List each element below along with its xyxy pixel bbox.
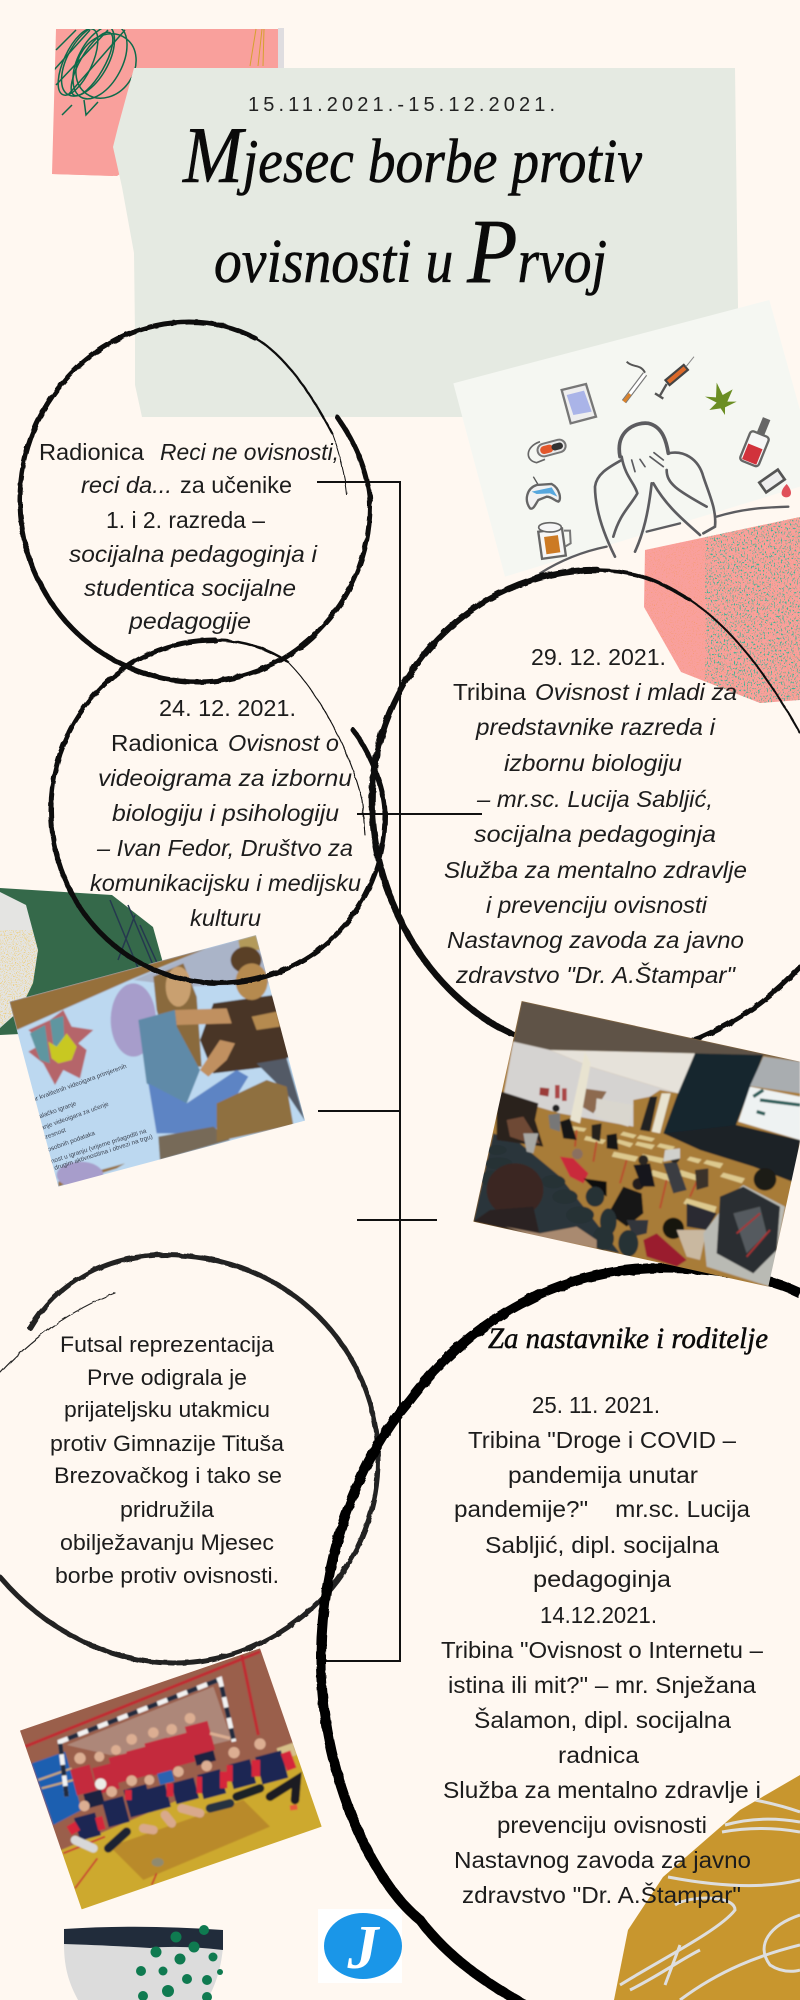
- slide text: [32, 1063, 154, 1172]
- text: circle 1 workshop: socijalna pedagoginja i: [69, 541, 318, 567]
- text: circle 1 workshop: studentica socijalne: [84, 575, 296, 601]
- seated students: [560, 1157, 588, 1183]
- text: circle 4 futsal: borbe protiv ovisnosti.: [55, 1563, 279, 1588]
- text: circle 1 workshop: reci da...: [81, 472, 172, 498]
- icon: beer mug: [538, 523, 571, 559]
- text: circle 4 futsal: obilježavanju Mjesec: [60, 1530, 274, 1555]
- front row in navy: [74, 1750, 288, 1841]
- gold shape with squiggles: [614, 1775, 800, 2000]
- text: circle 4 futsal: Brezovačkog i tako se: [54, 1463, 282, 1488]
- slide text: anje videoigara za učenje: [40, 1101, 110, 1132]
- timeline connector: [317, 482, 482, 1661]
- text: circle 2 workshop: – Ivan Fedor, Društvo za: [96, 835, 353, 861]
- desks: [572, 1126, 745, 1217]
- slide text: drugim aktivnostima i obvezi na trgu): [53, 1133, 154, 1172]
- green shape with pale piece: [0, 888, 170, 1035]
- text: circle 2 workshop: komunikacijsku i medijsku: [90, 870, 361, 896]
- title: Mjesec borbe protiv: [182, 112, 642, 200]
- text: circle 2 workshop: 24. 12. 2021.: [159, 695, 296, 721]
- brush circle 5: [321, 1268, 800, 2000]
- text: circle 3 tribune: [444, 644, 747, 988]
- grey torn paper title card: [113, 68, 738, 420]
- icon: pill capsule: [528, 438, 567, 463]
- text: circle 5 tribunes: pandemije?" mr.sc. Lucija: [454, 1496, 750, 1522]
- title: ovisnosti u Prvoj: [214, 200, 607, 302]
- back row in red: [70, 1721, 215, 1795]
- student with backpack: [703, 1185, 785, 1287]
- text: circle 1 workshop: za učenike: [180, 472, 292, 498]
- text: circle 3 tribune: predstavnike razreda i: [475, 714, 716, 740]
- text: circle 5 tribunes: Sabljić, dipl. socijalna: [485, 1532, 719, 1558]
- text: circle 4 futsal: Prve odigrala je: [87, 1365, 247, 1390]
- text: circle 4 futsal: Futsal reprezentacija: [60, 1332, 275, 1357]
- slide text: tresnost: [43, 1127, 67, 1141]
- slide text: osobnih podataka: [47, 1130, 96, 1154]
- text: circle 1 workshop: 1. i 2. razreda –: [106, 507, 265, 533]
- icon: person head in hands: [540, 423, 788, 573]
- text: circle 5 tribunes: Tribina "Droge i COVID –: [468, 1427, 736, 1453]
- text: circle 4 futsal: pridružila: [120, 1497, 215, 1522]
- brush circle 3: [372, 570, 800, 1052]
- text: circle 1 workshop: pedagogije: [128, 608, 251, 634]
- brush circle 4: [0, 1255, 378, 1663]
- photo: videogame workshop slide: [10, 935, 305, 1186]
- date range: 15.11.2021.-15.12.2021.: [248, 94, 555, 116]
- text: circle 3 tribune: Služba za mentalno zdravlje: [444, 857, 747, 883]
- text: circle 3 tribune: zdravstvo "Dr. A.Štampar": [455, 961, 737, 988]
- text: circle 2 workshop: [90, 695, 361, 931]
- photo: auditorium tribune: [460, 1000, 800, 1300]
- logo: J: [346, 1914, 380, 1982]
- text: circle 1 workshop: Reci ne ovisnosti,: [160, 439, 339, 465]
- text: circle 5 tribunes: istina ili mit?" – mr. Snježana: [448, 1672, 756, 1698]
- text: circle 5 tribunes: Nastavnog zavoda za javno: [454, 1847, 751, 1873]
- pink torn paper with scribble: [50, 15, 284, 176]
- logo: [318, 1909, 402, 1983]
- text: circle 2 workshop: Ovisnost o: [228, 730, 339, 756]
- icon: syringe: [655, 357, 694, 399]
- text: circle 3 tribune: Tribina: [453, 679, 526, 705]
- photo: futsal team: [20, 1648, 322, 1910]
- icon: cannabis leaf: [705, 383, 737, 415]
- slide text: ar kvalitetnih videoigara primjerenih: [32, 1063, 128, 1104]
- student in red: [643, 1233, 687, 1267]
- text: circle 2 workshop: kulturu: [190, 905, 261, 931]
- seated girl foreground: [486, 1163, 544, 1210]
- seats: [480, 1145, 638, 1257]
- text: circle 4 futsal: [50, 1332, 285, 1588]
- star icon on slide: [28, 1010, 93, 1085]
- text: circle 5 tribunes: 14.12.2021.: [540, 1602, 657, 1628]
- text: circle 2 workshop: videoigrama za izbornu: [98, 765, 352, 791]
- bowl with green dots: [64, 1925, 223, 2000]
- heading: for teachers and parents: Za nastavnike i roditelje: [488, 1322, 768, 1355]
- slide text: alačko igranje: [38, 1100, 78, 1120]
- brush circle 2: [51, 640, 385, 983]
- text: circle 4 futsal: prijateljsku utakmicu: [64, 1397, 270, 1422]
- text: circle 5 tribunes: pedagoginja: [533, 1566, 671, 1592]
- text: circle 5 tribunes: [441, 1392, 763, 1908]
- text: circle 3 tribune: izbornu biologiju: [504, 750, 682, 776]
- text: circle 2 workshop: Radionica: [111, 730, 218, 756]
- text: circle 3 tribune: socijalna pedagoginja: [474, 821, 716, 847]
- slide text: nost u igranju (vrijeme prilagoditi na: [50, 1128, 148, 1165]
- title: [182, 112, 642, 302]
- text: circle 5 tribunes: Šalamon, dipl. socijalna: [474, 1706, 731, 1733]
- text: circle 3 tribune: – mr.sc. Lucija Sabljić,: [476, 786, 713, 812]
- illustration: addictions panel: [453, 300, 800, 577]
- text: circle 2 workshop: biologiju i psihologiju: [112, 800, 339, 826]
- text: circle 4 futsal: protiv Gimnazije Tituša: [50, 1431, 285, 1456]
- text: circle 5 tribunes: zdravstvo "Dr. A.Štampar": [462, 1881, 741, 1908]
- text: circle 5 tribunes: Tribina "Ovisnost o Internetu –: [441, 1637, 763, 1663]
- text: circle 5 tribunes: Služba za mentalno zdravlje i: [443, 1777, 761, 1803]
- icon: tablet: [562, 384, 596, 423]
- icon: razor and drop: [759, 470, 791, 497]
- text: circle 3 tribune: i prevenciju ovisnosti: [486, 892, 708, 918]
- text: circle 3 tribune: 29. 12. 2021.: [531, 644, 666, 670]
- text: circle 1 workshop: Radionica: [39, 439, 144, 465]
- text: circle 5 tribunes: pandemija unutar: [508, 1462, 698, 1488]
- text: circle 1 workshop: [39, 439, 339, 634]
- text: circle 5 tribunes: 25. 11. 2021.: [532, 1392, 660, 1418]
- pink speckled shape right: [644, 517, 800, 707]
- icon: game controller: [527, 477, 560, 509]
- brush circle 1: [20, 322, 370, 682]
- text: circle 3 tribune: Ovisnost i mladi za: [535, 679, 737, 705]
- icon: cigarette: [624, 362, 645, 402]
- text: circle 5 tribunes: radnica: [558, 1742, 639, 1768]
- text: circle 5 tribunes: prevenciju ovisnosti: [497, 1812, 707, 1838]
- legs: [75, 1780, 297, 1848]
- text: circle 3 tribune: Nastavnog zavoda za javno: [447, 927, 744, 953]
- icon: wine bottle: [739, 415, 776, 467]
